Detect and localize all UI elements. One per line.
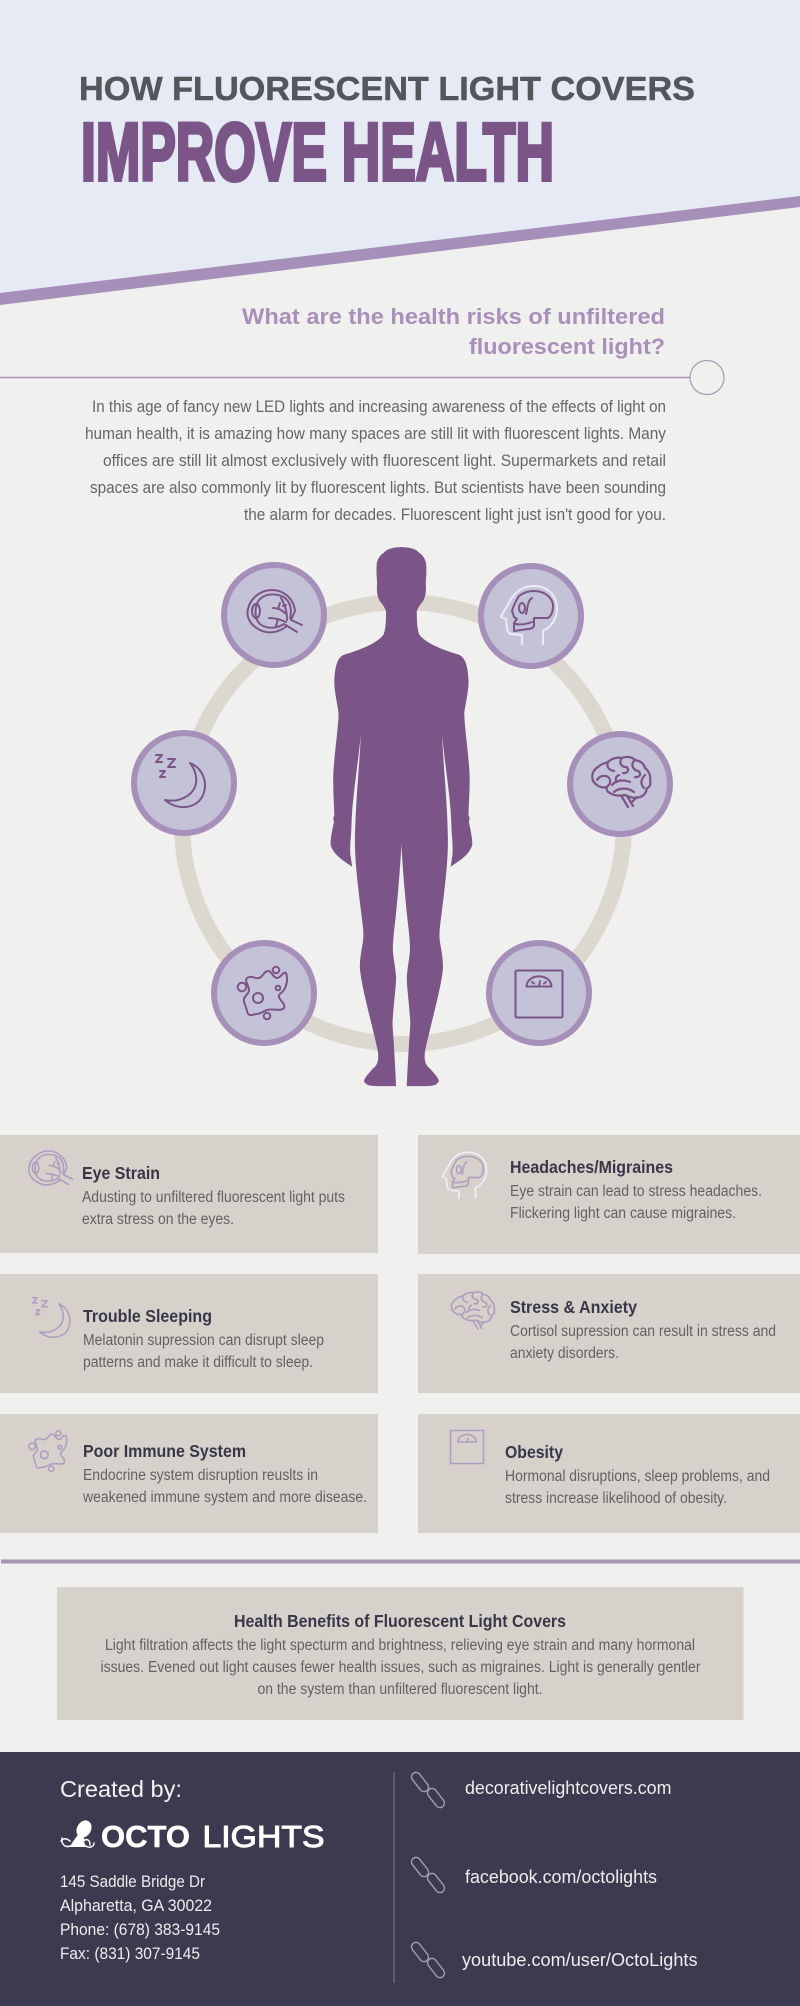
footer divider bbox=[393, 1772, 395, 1983]
human silhouette bbox=[331, 547, 472, 1086]
address: Alpharetta, GA 30022 bbox=[60, 1896, 212, 1915]
icon circle: brain bbox=[570, 734, 670, 834]
title line one: HOW FLUORESCENT LIGHT COVERS bbox=[79, 70, 695, 107]
icon circle: eye bbox=[224, 565, 324, 665]
footer panel bbox=[0, 1752, 800, 2006]
card: eye strain: extra stress on the eyes. bbox=[82, 1211, 234, 1228]
section heading: What are the health risks of unfiltered bbox=[242, 304, 665, 329]
card: obesity bbox=[418, 1414, 800, 1533]
link: website: decorativelightcovers.com bbox=[465, 1778, 672, 1798]
panel: health benefits bbox=[57, 1587, 744, 1720]
link: facebook bbox=[410, 1856, 657, 1894]
diagonal band bbox=[0, 196, 800, 305]
address: Fax: (831) 307-9145 bbox=[60, 1944, 200, 1963]
card: obesity: Obesity bbox=[505, 1442, 563, 1462]
panel: health benefits: issues. Evened out light causes fewer health issues, such as migraines. Light is generally gentler bbox=[100, 1659, 700, 1676]
card: headaches: Eye strain can lead to stress headaches. bbox=[510, 1183, 762, 1200]
address bbox=[60, 1872, 220, 1963]
icon circle: cell bbox=[214, 943, 314, 1043]
link: youtube bbox=[410, 1941, 698, 1979]
card: stress and anxiety: Cortisol supression can result in stress and bbox=[510, 1323, 776, 1340]
created by: Created by: bbox=[60, 1776, 182, 1802]
icon: cell bbox=[29, 1431, 67, 1471]
card: eye strain bbox=[0, 1135, 378, 1253]
card: trouble sleeping: patterns and make it difficult to sleep. bbox=[83, 1354, 313, 1371]
card: poor immune system: weakened immune system and more disease. bbox=[82, 1489, 367, 1506]
heading rule with circle bbox=[0, 360, 724, 394]
panel: health benefits: Health Benefits of Fluorescent Light Covers bbox=[234, 1611, 566, 1631]
ring bbox=[182, 602, 624, 1044]
card: stress and anxiety: anxiety disorders. bbox=[510, 1345, 619, 1362]
panel: health benefits: Light filtration affects the light specturm and brightness, relieving eye strain and many hormonal bbox=[105, 1637, 695, 1654]
card: poor immune system bbox=[0, 1414, 378, 1533]
card: eye strain: Eye Strain bbox=[82, 1163, 160, 1183]
card: trouble sleeping bbox=[0, 1274, 378, 1393]
address: 145 Saddle Bridge Dr bbox=[60, 1872, 205, 1891]
section divider bbox=[1, 1560, 800, 1564]
link: website bbox=[410, 1771, 672, 1809]
icon circle: scale bbox=[489, 943, 589, 1043]
card: poor immune system: Endocrine system disruption reuslts in bbox=[83, 1467, 318, 1484]
intro paragraph: human health, it is amazing how many spaces are still lit with fluorescent lights. Many bbox=[85, 425, 667, 443]
card: poor immune system: Poor Immune System bbox=[83, 1441, 246, 1461]
intro paragraph: offices are still lit almost exclusively with fluorescent light. Supermarkets and retail bbox=[103, 452, 666, 470]
card: headaches bbox=[418, 1135, 800, 1254]
logo: octo lights bbox=[61, 1818, 324, 1854]
body diagram bbox=[134, 547, 670, 1086]
card: headaches: Headaches/Migraines bbox=[510, 1157, 673, 1177]
icon: skull bbox=[442, 1152, 487, 1198]
section heading bbox=[242, 304, 665, 359]
icon: moon bbox=[33, 1298, 70, 1337]
card: obesity: stress increase likelihood of obesity. bbox=[505, 1490, 727, 1507]
icon circle: skull bbox=[481, 566, 581, 666]
icon circle: moon bbox=[134, 733, 234, 833]
icon: eye bbox=[29, 1151, 72, 1185]
icon: scale bbox=[450, 1430, 484, 1464]
intro paragraph: spaces are also commonly lit by fluorescent lights. But scientists have been sounding bbox=[90, 479, 666, 497]
card: headaches: Flickering light can cause migraines. bbox=[510, 1205, 736, 1222]
link: facebook: facebook.com/octolights bbox=[465, 1867, 657, 1887]
intro paragraph bbox=[85, 398, 667, 524]
card: stress and anxiety bbox=[418, 1274, 800, 1393]
card: trouble sleeping: Melatonin supression can disrupt sleep bbox=[83, 1332, 324, 1349]
logo: octo lights: OCTO bbox=[101, 1819, 190, 1854]
logo: octo lights: LIGHTS bbox=[202, 1819, 324, 1854]
card: obesity: Hormonal disruptions, sleep problems, and bbox=[505, 1468, 770, 1485]
title line two: IMPROVE HEALTH bbox=[81, 107, 554, 198]
address: Phone: (678) 383-9145 bbox=[60, 1920, 220, 1939]
card: stress and anxiety: Stress & Anxiety bbox=[510, 1297, 637, 1317]
header panel bbox=[0, 0, 800, 305]
intro paragraph: the alarm for decades. Fluorescent light just isn't good for you. bbox=[244, 506, 666, 524]
card: eye strain: Adusting to unfiltered fluorescent light puts bbox=[82, 1189, 345, 1206]
link: youtube: youtube.com/user/OctoLights bbox=[462, 1950, 698, 1970]
panel: health benefits: on the system than unfiltered fluorescent light. bbox=[258, 1681, 542, 1698]
card: trouble sleeping: Trouble Sleeping bbox=[83, 1306, 212, 1326]
section heading: fluorescent light? bbox=[469, 334, 665, 359]
intro paragraph: In this age of fancy new LED lights and increasing awareness of the effects of light on bbox=[92, 398, 666, 416]
icon: octopus bbox=[61, 1818, 95, 1847]
icon: brain bbox=[451, 1292, 494, 1329]
